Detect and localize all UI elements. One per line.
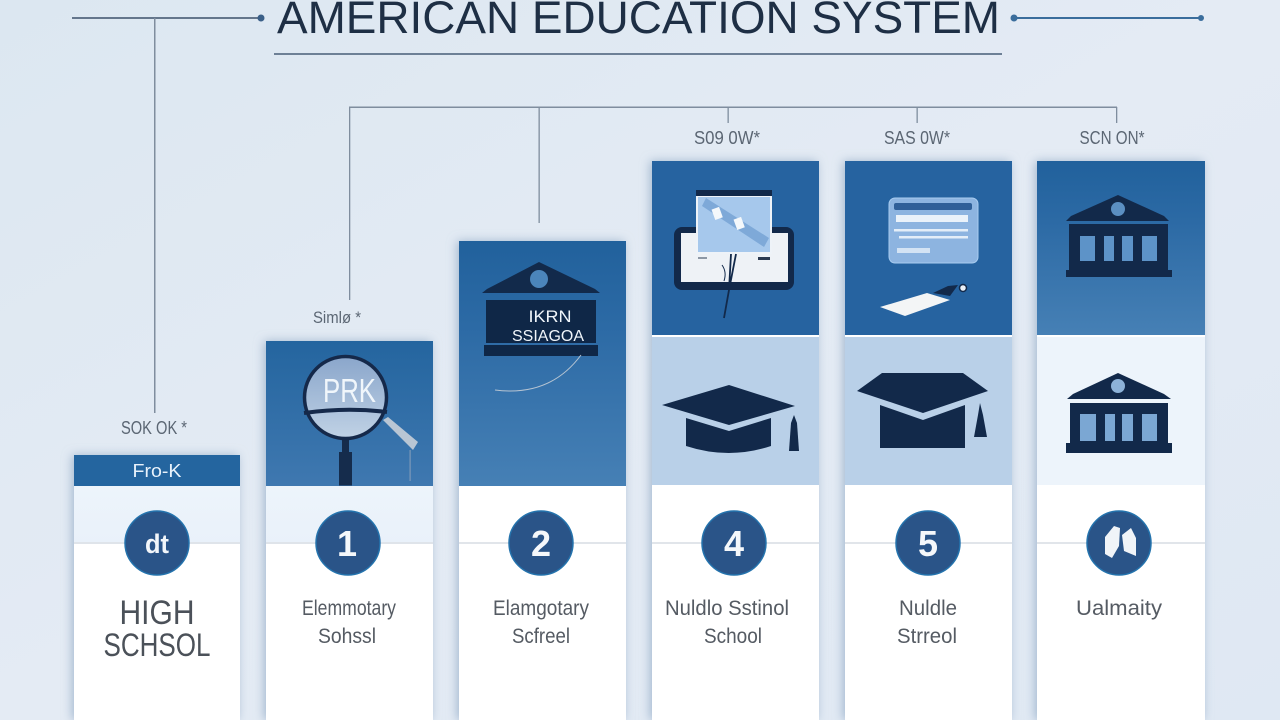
right title connector xyxy=(1010,14,1204,22)
title underline xyxy=(274,53,1002,55)
icon: school building sign xyxy=(482,262,600,391)
icon: magnifying glass: PRK xyxy=(323,372,376,409)
column label: first step: SOK OK * xyxy=(121,418,187,438)
step badge: 5 xyxy=(918,523,938,564)
panel: university column xyxy=(1037,161,1205,720)
icon: school building sign: SSIAGOA xyxy=(512,328,584,345)
icon: graduation cap large xyxy=(857,373,988,448)
step badge: 1 xyxy=(337,523,357,564)
column name xyxy=(104,594,210,663)
column name: SCHSOL xyxy=(104,627,210,663)
panel: Pre-K magnifier column xyxy=(266,341,433,720)
left title connector xyxy=(72,14,264,413)
blue image block xyxy=(266,341,433,486)
column name: Nuldle xyxy=(899,597,957,620)
column name xyxy=(665,597,789,648)
icon: magnifying glass xyxy=(304,356,418,486)
column label: fourth step: S09 0W* xyxy=(694,128,760,148)
icon: university building xyxy=(1066,195,1172,277)
column name xyxy=(302,597,396,648)
step badge xyxy=(509,511,573,575)
column name: Sohssl xyxy=(318,625,376,648)
pale block xyxy=(1037,337,1205,485)
step badge xyxy=(125,511,189,575)
icon: graduation cap xyxy=(662,385,799,453)
panel: elementary column xyxy=(459,241,626,720)
panel: second middle school column xyxy=(845,161,1012,720)
column name: Strreol xyxy=(897,625,957,648)
light blue block xyxy=(652,337,819,485)
band label: Fro-K xyxy=(132,461,182,481)
step badge: dt xyxy=(145,529,169,559)
step badge xyxy=(702,511,766,575)
column name: Nuldlo Sstinol xyxy=(665,597,789,620)
panel: Pre-K / high school column xyxy=(74,455,240,720)
column name: Elemmotary xyxy=(302,597,396,620)
column name: HIGH xyxy=(120,594,194,632)
blue image block xyxy=(459,241,626,486)
step badge xyxy=(316,511,380,575)
column name xyxy=(897,597,957,648)
icon: lower university building xyxy=(1066,373,1172,453)
icon: tablet with picture xyxy=(674,190,794,318)
icon: school building sign: IKRN xyxy=(528,307,572,326)
column name xyxy=(493,597,589,648)
step badge with map icon xyxy=(1087,511,1151,575)
column name: School xyxy=(704,625,762,648)
column name: Elamgotary xyxy=(493,597,589,620)
panel: middle school column xyxy=(652,161,819,720)
column label: sixth step: SCN ON* xyxy=(1080,128,1144,148)
column label: second step: Simlø * xyxy=(313,308,361,327)
icon: form card and paper xyxy=(880,198,978,316)
light blue block xyxy=(845,337,1012,485)
step badge: 4 xyxy=(724,523,744,564)
header band xyxy=(74,455,240,486)
top connector lines xyxy=(349,106,1117,300)
column name: Ualmaity xyxy=(1076,597,1163,620)
blue image block xyxy=(1037,161,1205,335)
blue image block xyxy=(652,161,819,335)
column label: fifth step: SAS 0W* xyxy=(884,128,950,148)
step badge: 2 xyxy=(531,523,551,564)
blue image block xyxy=(845,161,1012,335)
step badge xyxy=(896,511,960,575)
column name: Scfreel xyxy=(512,625,570,648)
